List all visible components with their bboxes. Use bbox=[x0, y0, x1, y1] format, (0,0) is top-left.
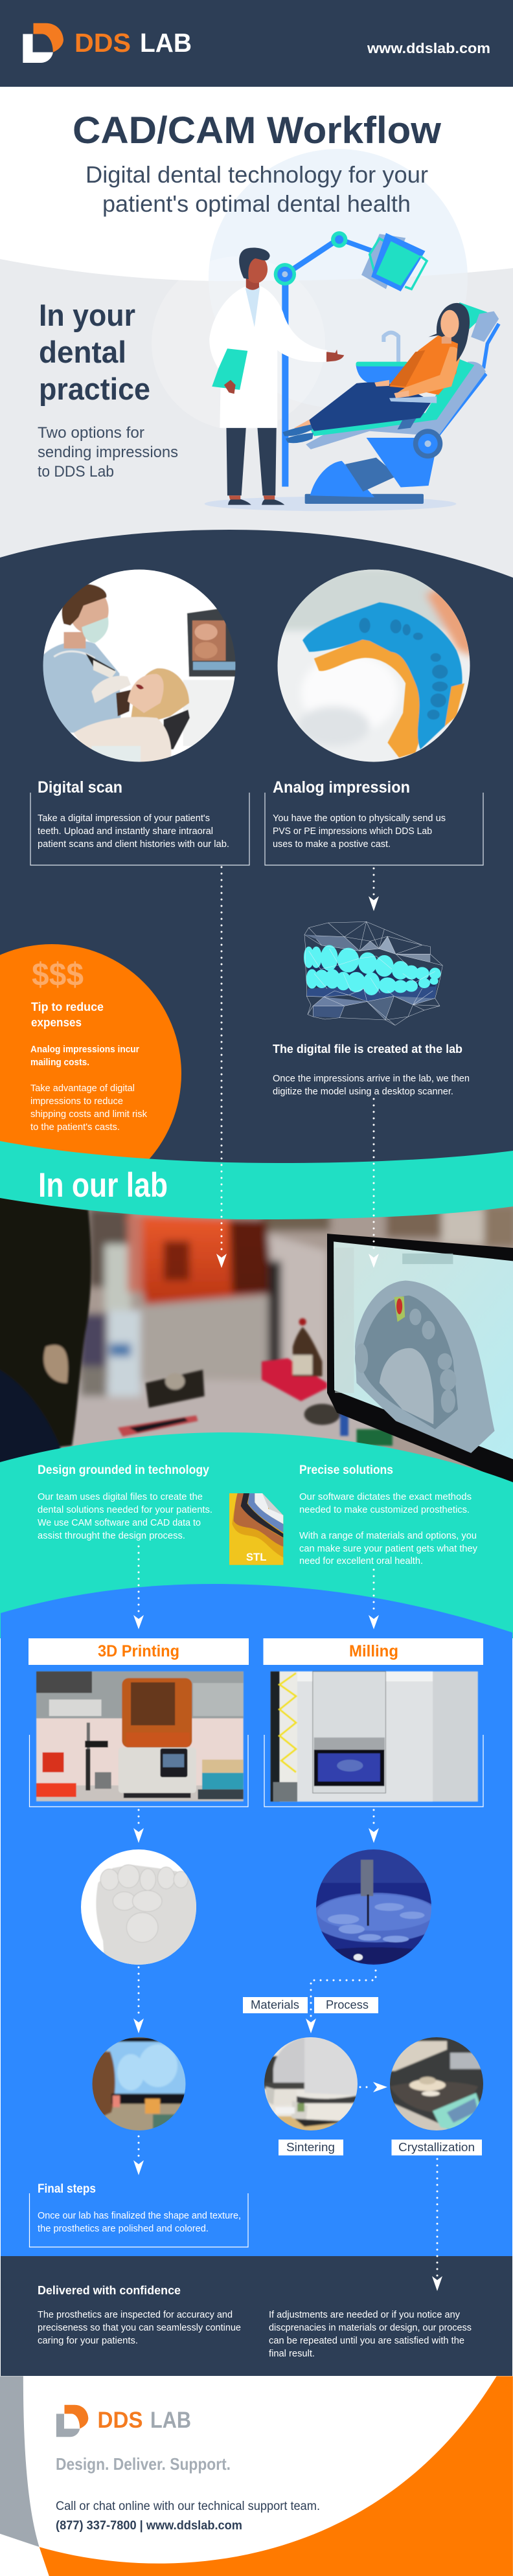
tip heading: expenses bbox=[31, 1016, 82, 1029]
tip text: to the patient's casts. bbox=[30, 1122, 120, 1133]
photo: lab workstation bbox=[0, 1195, 513, 1492]
body text: You have the option to physically send us bbox=[273, 813, 446, 824]
intro text: to DDS Lab bbox=[38, 463, 114, 480]
monitor bbox=[327, 1234, 513, 1486]
body text: We use CAM software and CAD data to bbox=[38, 1518, 201, 1528]
logo mark bbox=[23, 23, 63, 63]
flow arrows bbox=[133, 867, 442, 2291]
heading: in your dental practice: In your bbox=[39, 298, 135, 332]
title bar bbox=[28, 1638, 249, 1665]
outline bbox=[30, 2193, 248, 2247]
arrow: spindle to sintering bbox=[306, 1971, 376, 2033]
patient bbox=[74, 668, 190, 766]
arrow: crystallization to delivery bbox=[432, 2159, 442, 2291]
arrow: design to 3D printing bbox=[133, 1546, 144, 1629]
person with hair bbox=[0, 1195, 91, 1465]
card: digital scan bbox=[30, 778, 249, 865]
body text: the prosthetics are polished and colored. bbox=[38, 2224, 209, 2234]
labels: materials and process bbox=[243, 1997, 378, 2013]
tip text bbox=[30, 1045, 148, 1133]
intro text: sending impressions bbox=[38, 444, 178, 461]
title bar bbox=[263, 1638, 483, 1665]
dark section: impressions bbox=[0, 530, 513, 1172]
tip heading bbox=[31, 1000, 104, 1029]
arrow: precise solutions to milling bbox=[369, 1570, 379, 1629]
intro text bbox=[38, 424, 178, 480]
final steps card bbox=[30, 2182, 248, 2247]
arrow: sintering to crystallization bbox=[360, 2082, 387, 2092]
photo: sintering furnace bbox=[264, 2037, 358, 2130]
website url: www.ddslab.com bbox=[367, 40, 490, 56]
photo: crystallization furnace bbox=[390, 2037, 483, 2130]
logo wordmark: DDS bbox=[74, 28, 131, 58]
contact text: Call or chat online with our technical support team. bbox=[56, 2500, 320, 2513]
heading: Precise solutions bbox=[299, 1463, 393, 1477]
logo wordmark bbox=[74, 28, 192, 58]
arrow: mill to spindle bbox=[369, 1810, 379, 1843]
body text: patient scans and client histories with our lab. bbox=[38, 839, 229, 850]
monitor bbox=[187, 609, 239, 677]
body text: Our software dictates the exact methods bbox=[299, 1492, 472, 1502]
teal lab band bbox=[0, 1141, 513, 1230]
tagline: Design. Deliver. Support. bbox=[56, 2454, 231, 2474]
footer logo wordmark: DDS bbox=[97, 2408, 142, 2433]
icon: STL file bbox=[229, 1493, 283, 1565]
heading: in your dental practice: practice bbox=[39, 372, 150, 406]
impression tray bbox=[302, 602, 464, 758]
right text: discprenacies in materials or design, our process bbox=[269, 2323, 472, 2333]
arrow: digital scan to lab bbox=[216, 867, 227, 1268]
outline bbox=[30, 793, 249, 865]
labels: materials and process: Materials bbox=[251, 1998, 299, 2011]
dentist bbox=[40, 584, 131, 733]
bracket outline bbox=[30, 1735, 248, 1807]
body text: Our team uses digital files to create the bbox=[38, 1492, 203, 1502]
outline bbox=[265, 793, 483, 865]
tip to reduce expenses bbox=[30, 956, 148, 1133]
heading: in our lab: In our lab bbox=[38, 1166, 168, 1204]
subtitle: patient's optimal dental health bbox=[102, 190, 411, 217]
body text bbox=[299, 1492, 478, 1566]
body text: digitize the model using a desktop scanner. bbox=[273, 1087, 453, 1097]
arrow: model to scan bbox=[133, 1967, 144, 2033]
body text bbox=[273, 813, 446, 850]
phone and website: (877) 337-7800 | www.ddslab.com bbox=[56, 2519, 242, 2533]
faint backdrop circles bbox=[152, 149, 468, 430]
title: Milling bbox=[349, 1642, 398, 1660]
sink bbox=[356, 333, 408, 384]
heading: Digital scan bbox=[38, 778, 122, 797]
right text: can be repeated until you are satisfied with the bbox=[269, 2336, 464, 2346]
teal design section bbox=[0, 1432, 513, 1638]
photo: dentist digital scan bbox=[40, 568, 239, 766]
label: sintering: Sintering bbox=[286, 2141, 335, 2154]
body text: teeth. Upload and instantly share intraoral bbox=[38, 826, 213, 837]
tip text: impressions to reduce bbox=[30, 1096, 123, 1107]
milling panel bbox=[263, 1638, 483, 1807]
heading: Analog impression bbox=[273, 778, 410, 797]
footer bbox=[0, 2376, 513, 2576]
footer logo mark bbox=[56, 2405, 88, 2437]
body text: can make sure your patient gets what they bbox=[299, 1544, 478, 1554]
delivered with confidence band bbox=[1, 2256, 512, 2376]
footer decorative shapes bbox=[0, 2376, 513, 2576]
body text: Once the impressions arrive in the lab, we then bbox=[273, 1074, 470, 1084]
body text bbox=[38, 813, 229, 850]
photo: blue scanned tooth on monitor bbox=[91, 2036, 189, 2133]
body text: With a range of materials and options, you bbox=[299, 1531, 477, 1541]
title: 3D Printing bbox=[98, 1642, 179, 1660]
heading: Delivered with confidence bbox=[38, 2284, 181, 2297]
left text: caring for your patients. bbox=[38, 2336, 138, 2346]
patient figure bbox=[282, 303, 470, 443]
design text column bbox=[38, 1463, 212, 1541]
logo wordmark: LAB bbox=[140, 28, 192, 58]
arrow: printer to model bbox=[133, 1810, 144, 1843]
footer logo wordmark: LAB bbox=[150, 2408, 191, 2433]
intro text: Two options for bbox=[38, 424, 144, 442]
body text: assist throught the design process. bbox=[38, 1531, 185, 1541]
body text: Take a digital impression of your patient's bbox=[38, 813, 210, 824]
file extension label: STL bbox=[246, 1551, 266, 1563]
tip text: shipping costs and limit risk bbox=[30, 1109, 148, 1120]
dollar signs: $$$ bbox=[32, 956, 84, 993]
card: analog impression bbox=[265, 778, 483, 865]
right text: If adjustments are needed or if you notice any bbox=[269, 2310, 461, 2320]
photo: 3D printed model bbox=[81, 1849, 196, 1965]
orange tip blob bbox=[0, 944, 181, 1203]
label: sintering bbox=[279, 2140, 343, 2155]
subtitle bbox=[86, 161, 428, 217]
dental lamp bbox=[274, 231, 427, 487]
arrow: analog impression to mesh bbox=[369, 868, 379, 911]
tip text: Analog impressions incur bbox=[30, 1045, 139, 1055]
label: crystallization: Crystallization bbox=[398, 2141, 475, 2154]
body text: PVS or PE impressions which DDS Lab bbox=[273, 826, 432, 837]
header bar bbox=[0, 0, 513, 87]
left text bbox=[38, 2310, 241, 2346]
body text: uses to make a postive cast. bbox=[273, 839, 391, 850]
tip heading: Tip to reduce bbox=[31, 1000, 104, 1013]
photo: milling machine bbox=[271, 1671, 478, 1802]
title: CAD/CAM Workflow bbox=[73, 109, 442, 152]
body text bbox=[38, 2211, 241, 2234]
labels: materials and process: Process bbox=[326, 1998, 369, 2011]
3D mesh scan of teeth bbox=[304, 921, 442, 1025]
dentist figure bbox=[209, 248, 344, 505]
arrow: scan to final steps bbox=[133, 2136, 144, 2175]
illustration: dentist and patient bbox=[205, 231, 499, 511]
3D printing panel bbox=[28, 1638, 249, 1807]
body text: dental solutions needed for your patients. bbox=[38, 1505, 212, 1515]
digital file text bbox=[273, 1042, 470, 1097]
photo: analog impression bbox=[275, 568, 474, 766]
bracket outline bbox=[264, 1735, 483, 1807]
blue production section bbox=[1, 1584, 512, 2256]
light blue backdrop circle bbox=[209, 149, 468, 408]
body text: need for excellent oral health. bbox=[299, 1556, 423, 1566]
floor shadow bbox=[205, 497, 456, 511]
body text: needed to make customized prosthetics. bbox=[299, 1505, 470, 1515]
body text bbox=[273, 1074, 470, 1097]
right text bbox=[269, 2310, 472, 2359]
grey practice section bbox=[0, 259, 513, 583]
heading: Design grounded in technology bbox=[38, 1463, 209, 1477]
heading: in your dental practice bbox=[39, 298, 150, 406]
body text bbox=[38, 1492, 212, 1541]
photo: milling spindle bbox=[316, 1849, 431, 1965]
tip text: mailing costs. bbox=[30, 1057, 89, 1068]
heading: in your dental practice: dental bbox=[39, 335, 126, 369]
photo: desktop 3D printer bbox=[36, 1671, 244, 1802]
heading: The digital file is created at the lab bbox=[273, 1042, 462, 1056]
right text: final result. bbox=[269, 2349, 315, 2359]
body text: Once our lab has finalized the shape and texture, bbox=[38, 2211, 241, 2221]
heading: Final steps bbox=[38, 2182, 96, 2196]
dental chair bbox=[305, 302, 499, 504]
subtitle: Digital dental technology for your bbox=[86, 161, 428, 188]
footer logo wordmark bbox=[97, 2408, 191, 2433]
tip text: Take advantage of digital bbox=[30, 1083, 135, 1094]
arrow: digital file to lab bbox=[369, 1099, 379, 1268]
left text: The prosthetics are inspected for accuracy and bbox=[38, 2310, 233, 2320]
precise solutions column bbox=[299, 1463, 478, 1566]
left text: preciseness so that you can seamlessly continue bbox=[38, 2323, 241, 2333]
label: crystallization bbox=[391, 2140, 482, 2155]
